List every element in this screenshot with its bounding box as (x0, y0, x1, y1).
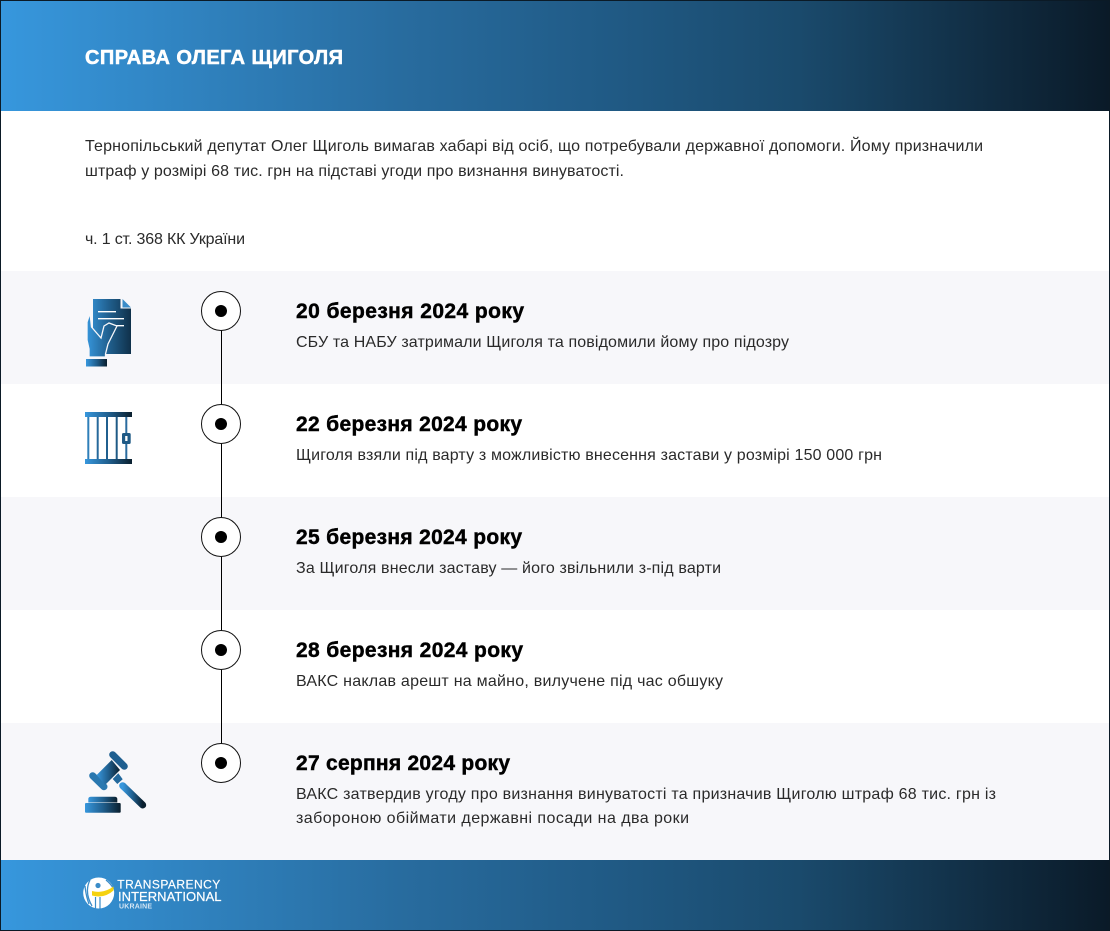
icon: hand with document (86, 299, 131, 366)
legal article: ч. 1 ст. 368 КК України (85, 231, 245, 248)
timeline marker 4 (202, 630, 240, 670)
event 3: За Щиголя внесли заставу — його звільнили з-під варти (296, 560, 721, 577)
event 4: ВАКС наклав арешт на майно, вилучене під час обшуку (296, 673, 723, 690)
event 5: ВАКС затвердив угоду про визнання винуватості та призначив Щиголю штраф 68 тис. грн із (296, 786, 996, 803)
timeline marker 5 (202, 744, 240, 782)
date 3: 25 березня 2024 року (296, 526, 522, 549)
icon: gavel (85, 755, 143, 813)
header band (1, 1, 1109, 111)
footer logo (83, 878, 222, 910)
footer logo: INTERNATIONAL (118, 889, 222, 904)
intro text: Тернопільський депутат Олег Щиголь вимагав хабарі від осіб, що потребували державної допомоги. Йому призначили (85, 136, 983, 155)
date 1: 20 березня 2024 року (296, 300, 524, 323)
event 2: Щиголя взяли під варту з можливістю внесення застави у розмірі 150 000 грн (296, 447, 882, 464)
date 2: 22 березня 2024 року (296, 413, 522, 436)
intro text (85, 136, 983, 180)
title: СПРАВА ОЛЕГА ЩИГОЛЯ (85, 47, 343, 69)
event 5: забороною обіймати державні посади на два роки (296, 810, 689, 827)
row backgrounds (1, 271, 1109, 860)
event 1: СБУ та НАБУ затримали Щиголя та повідомили йому про підозру (296, 334, 789, 351)
intro text: штраф у розмірі 68 тис. грн на підставі угоди про визнання винуватості. (85, 163, 624, 180)
footer band (1, 860, 1109, 930)
date 4: 28 березня 2024 року (296, 639, 523, 662)
footer logo: UKRAINE (119, 904, 152, 910)
date 5: 27 серпня 2024 року (296, 752, 510, 775)
timeline line (220, 311, 222, 763)
timeline marker 1 (202, 292, 240, 330)
timeline marker 2 (202, 404, 240, 444)
timeline marker 3 (202, 518, 240, 556)
icon: prison bars (85, 412, 132, 464)
footer logo: TRANSPARENCY (117, 878, 220, 892)
event 5 (296, 786, 996, 827)
